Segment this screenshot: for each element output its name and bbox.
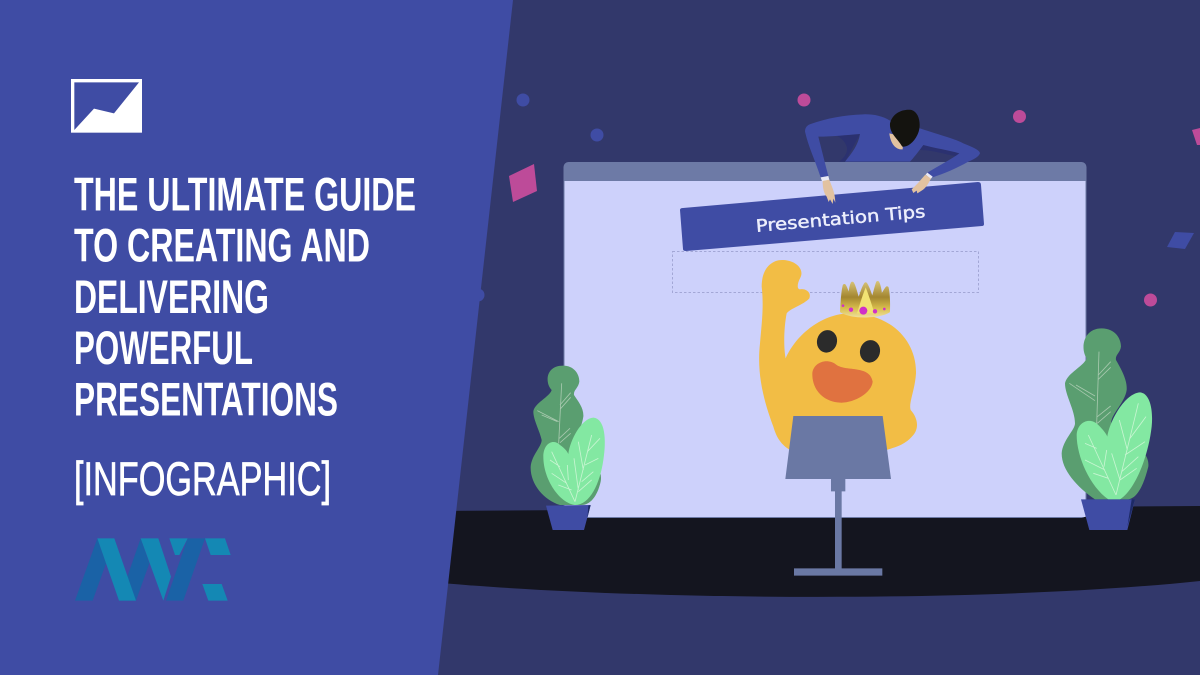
right cuff: [926, 173, 933, 179]
left blue panel: [0, 0, 513, 675]
dark foliage: [531, 366, 601, 505]
lectern: [785, 416, 891, 576]
left cuff: [821, 176, 829, 181]
dashed placeholder box: [672, 252, 978, 292]
dark foliage: [1062, 328, 1148, 499]
right hand: [912, 175, 931, 193]
crown: [842, 283, 888, 316]
left hand: [823, 180, 835, 204]
dark foliage veins: [1069, 352, 1111, 425]
right eye: [857, 338, 883, 365]
character behind lectern: [759, 260, 917, 576]
blue sweater: [805, 114, 980, 177]
confetti: [472, 94, 1200, 306]
title: PRESENTATIONS: [74, 372, 338, 426]
bright leaves: [1077, 392, 1152, 499]
left eye: [814, 328, 840, 355]
infographic tag: [INFOGRAPHIC]: [74, 452, 331, 505]
banner text: Presentation Tips: [755, 202, 926, 237]
presenter hands and cuffs: [821, 173, 933, 204]
right plant: [1062, 328, 1152, 530]
pot shadow: [1127, 499, 1135, 527]
title: TO CREATING AND: [74, 218, 370, 272]
bright leaf veins: [1085, 403, 1146, 495]
presenter leaning over screen: [805, 110, 980, 177]
pot: [546, 505, 591, 530]
presentation screen: [564, 162, 1086, 518]
banner: [680, 182, 984, 251]
title: DELIVERING: [74, 270, 269, 323]
face: [889, 133, 903, 149]
bright leaf veins: [550, 435, 600, 502]
chart icon: [71, 79, 142, 133]
title: THE ULTIMATE GUIDE: [74, 168, 416, 220]
hair: [890, 110, 920, 147]
pot shadow: [587, 505, 591, 518]
bright leaves: [543, 418, 605, 505]
dark foliage veins: [537, 383, 571, 443]
stage: [430, 506, 1200, 597]
title: POWERFUL: [74, 321, 253, 374]
pot: [1081, 499, 1135, 530]
title: [74, 168, 416, 426]
left plant: [531, 366, 605, 530]
under-arm shadow: [837, 134, 960, 168]
yellow body: [759, 260, 917, 450]
brand logo: [75, 538, 231, 601]
mouth: [812, 361, 873, 403]
